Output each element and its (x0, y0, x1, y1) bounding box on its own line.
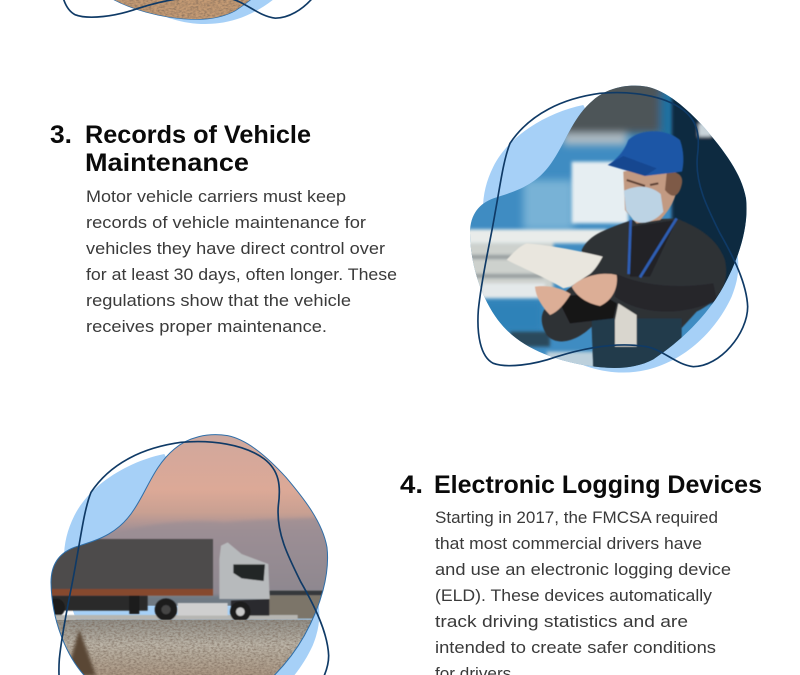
wheels (155, 598, 177, 621)
blob image: worker with clipboard (470, 86, 748, 372)
heading: 4. Electronic Logging Devices: 4. (400, 471, 423, 499)
lanyard (629, 218, 677, 277)
heading: 3. Records of Vehicle Maintenance (50, 121, 311, 177)
heading: 3. Records of Vehicle Maintenance: 3. (50, 121, 72, 149)
heading: 4. Electronic Logging Devices: Electronic Logging Devices (434, 471, 762, 499)
blob image: previous section photo cropped at top (63, 0, 312, 24)
worker jacket and vest (542, 218, 726, 370)
text block: electronic logging devices: intended to create safer conditions (435, 638, 716, 657)
ground (31, 615, 298, 620)
text block: vehicle maintenance records: for at least 30 days, often longer. These (86, 265, 397, 284)
text block: electronic logging devices: (ELD). These devices automatically (435, 586, 713, 605)
text block: vehicle maintenance records: records of vehicle maintenance for (86, 213, 366, 232)
text block: electronic logging devices: and use an electronic logging device (435, 560, 731, 579)
text block: vehicle maintenance records: Motor vehicle carriers must keep (86, 187, 346, 206)
heading: 3. Records of Vehicle Maintenance: Maintenance (85, 149, 249, 177)
text block: vehicle maintenance records: regulations show that the vehicle (86, 291, 351, 310)
text block: vehicle maintenance records: receives proper maintenance. (86, 317, 327, 336)
badge (615, 303, 637, 347)
heading: 3. Records of Vehicle Maintenance: Records of Vehicle (85, 121, 311, 149)
chassis (178, 603, 228, 616)
blob image: truck at dusk (50, 434, 330, 675)
text block: electronic logging devices: that most commercial drivers have (435, 534, 702, 553)
face and neck (623, 170, 677, 223)
text block: electronic logging devices: track driving statistics and are (435, 612, 688, 631)
paper (507, 243, 603, 288)
cab (219, 542, 270, 599)
text block: vehicle maintenance records: vehicles they have direct control over (86, 239, 385, 258)
hands (572, 274, 617, 306)
mask (624, 187, 663, 223)
text block: electronic logging devices: Starting in 2017, the FMCSA required (435, 508, 718, 527)
far field (268, 591, 334, 595)
text block: vehicle maintenance records (86, 187, 397, 336)
grass (56, 620, 312, 675)
text block: electronic logging devices (435, 508, 731, 675)
trailer (31, 539, 213, 591)
cap (608, 131, 683, 176)
